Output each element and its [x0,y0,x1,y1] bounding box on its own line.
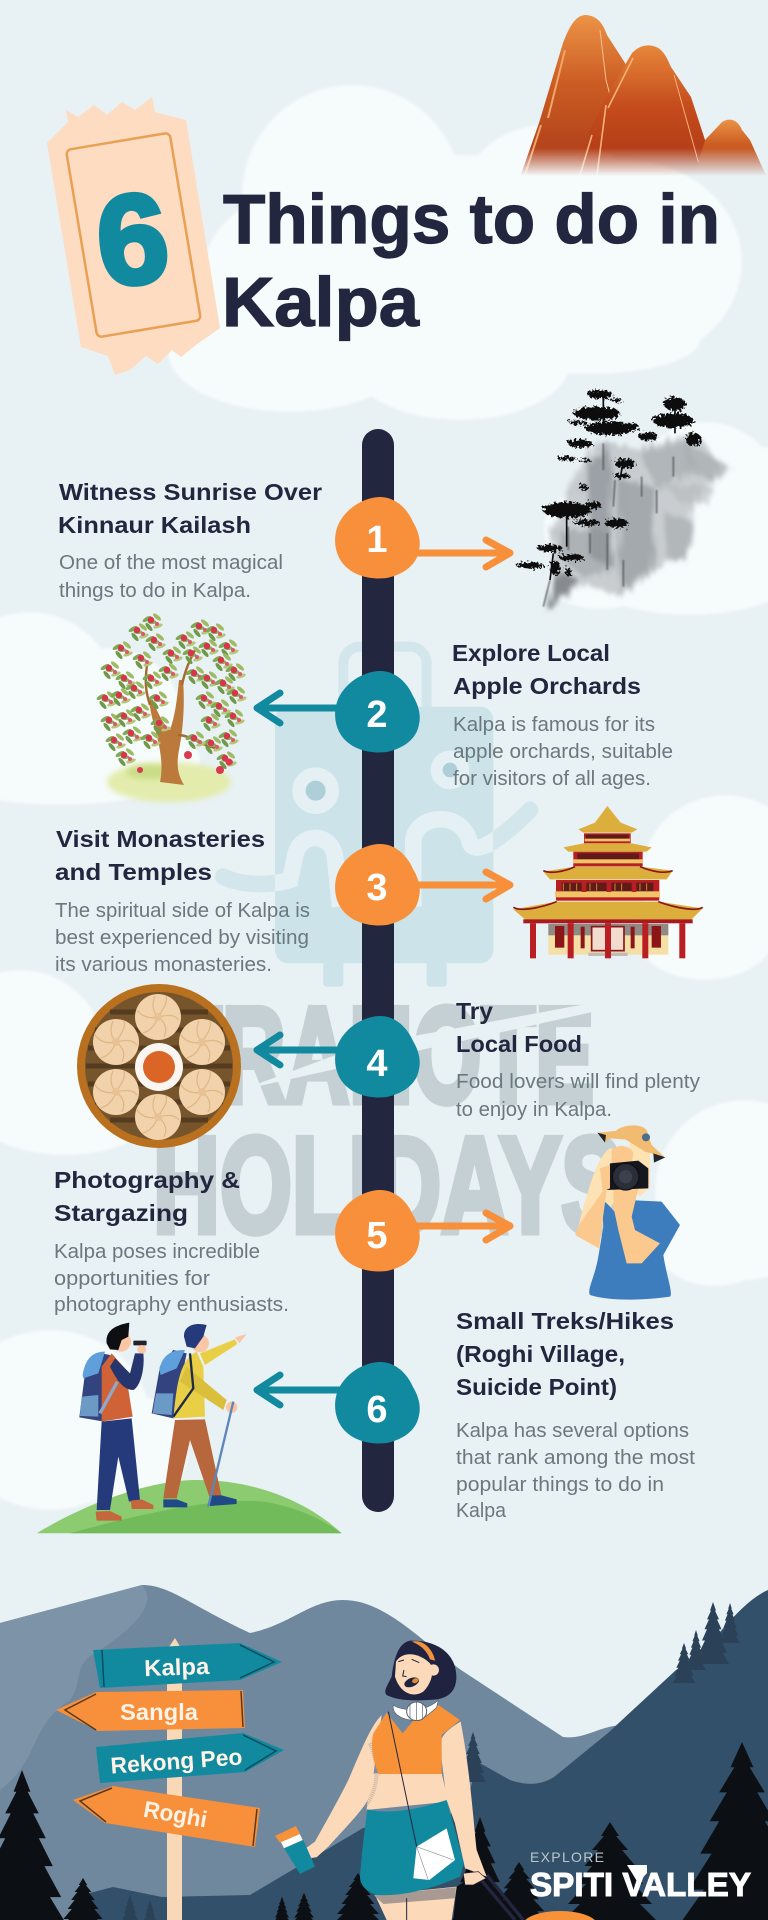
illustration: woman traveller [275,1641,523,1920]
sign: Rekong Peo [96,1733,284,1783]
text: step 6: Small Treks/Hikes [456,1308,674,1334]
illustration: hikers on hill [37,1323,342,1533]
cloud: right lower [653,1100,768,1286]
text: step 1 [58,479,322,602]
illustration: apple tree [96,612,247,802]
signpost [56,1638,284,1920]
illustration: orange mountains [519,15,768,180]
illustration: bottom mountains [0,1585,768,1920]
sign: Sangla: Sangla [120,1699,198,1725]
illustration: temple [513,806,703,958]
text: step 3: The spiritual side of Kalpa is [55,900,310,922]
text: step 2: apple orchards, suitable [453,741,673,763]
text: step 3 [55,826,310,976]
illustration: ink pine cliff [516,390,730,613]
watermark: brand text [153,979,623,1261]
step 4 marker and arrow: 4 [366,1043,388,1085]
title: Kalpa [222,263,420,341]
illustration: photographer [575,1125,680,1300]
text: step 2 [452,640,673,790]
sign: Kalpa: Kalpa [144,1653,210,1681]
text: step 1: Kinnaur Kailash [58,512,251,538]
cloud: right upper [544,422,768,615]
step 4 marker and arrow [257,1016,420,1098]
orange shape at bottom edge [522,1911,598,1920]
text: step 6: Kalpa has several options [456,1420,689,1442]
step 5 marker and arrow [335,1190,510,1272]
ticket with number 6: 6 [90,165,175,314]
timeline bar [362,429,394,1512]
text: step 4: to enjoy in Kalpa. [456,1099,612,1121]
step 2 marker and arrow [257,671,420,752]
text: step 5: photography enthusiasts. [54,1294,289,1316]
title: Things to do in [223,180,720,258]
sign: Rekong Peo: Rekong Peo [110,1743,243,1779]
text: step 5: Stargazing [54,1200,188,1226]
text: step 2: Apple Orchards [453,673,641,699]
text: step 2: for visitors of all ages. [453,768,651,790]
text: step 6: popular things to do in [456,1474,664,1496]
text: step 5: opportunities for [54,1268,210,1290]
cloud: left middle [0,612,200,805]
step 3 marker and arrow: 3 [366,867,388,909]
text: step 6 [456,1308,695,1522]
cloud: bottom left [0,1330,188,1510]
text: step 5 [54,1167,289,1316]
step 2 marker and arrow: 2 [366,694,388,736]
text: step 6: Suicide Point) [456,1374,617,1400]
cloud: title [168,85,742,420]
text: step 3: Visit Monasteries [56,826,265,852]
text: step 6: that rank among the most [456,1447,695,1469]
step 3 marker and arrow [335,844,510,926]
text: step 6: Kalpa [456,1500,507,1522]
step 6 marker and arrow [257,1362,420,1444]
logo: Explore Spiti Valley: EXPLORE [530,1849,604,1865]
sign: Roghi [73,1786,260,1847]
text: step 4 [456,998,700,1121]
text: step 5: Photography & [54,1167,240,1193]
text: step 4: Food lovers will find plenty [456,1071,700,1093]
text: step 4: Try [456,998,493,1024]
step 1 marker and arrow [335,497,510,578]
illustration: momos in basket [77,984,241,1148]
cloud: right middle [633,795,768,980]
title [222,180,720,341]
sign: Sangla [56,1690,245,1731]
text: step 3: best experienced by visiting [55,927,309,949]
step 5 marker and arrow: 5 [366,1215,388,1257]
step 1 marker and arrow: 1 [366,519,388,561]
sign: Kalpa [93,1643,282,1688]
text: step 4: Local Food [456,1031,582,1057]
text: step 3: and Temples [55,859,212,885]
text: step 1: things to do in Kalpa. [59,580,251,602]
text: step 2: Kalpa is famous for its [453,714,655,736]
cloud: left lower [0,970,165,1155]
text: step 2: Explore Local [452,640,610,666]
text: step 5: Kalpa poses incredible [54,1241,260,1263]
post [167,1638,182,1920]
ticket with number 6 [47,97,220,375]
step 6 marker and arrow: 6 [366,1389,388,1431]
text: step 1: Witness Sunrise Over [59,479,322,505]
watermark: luggage [223,647,530,987]
sign: Roghi: Roghi [142,1796,209,1832]
text: step 1: One of the most magical [59,552,283,574]
text: step 3: its various monasteries. [55,954,272,976]
logo: Explore Spiti Valley [530,1849,751,1903]
text: step 6: (Roghi Village, [456,1341,625,1367]
logo: Explore Spiti Valley: SPITI VALLEY [530,1866,751,1903]
